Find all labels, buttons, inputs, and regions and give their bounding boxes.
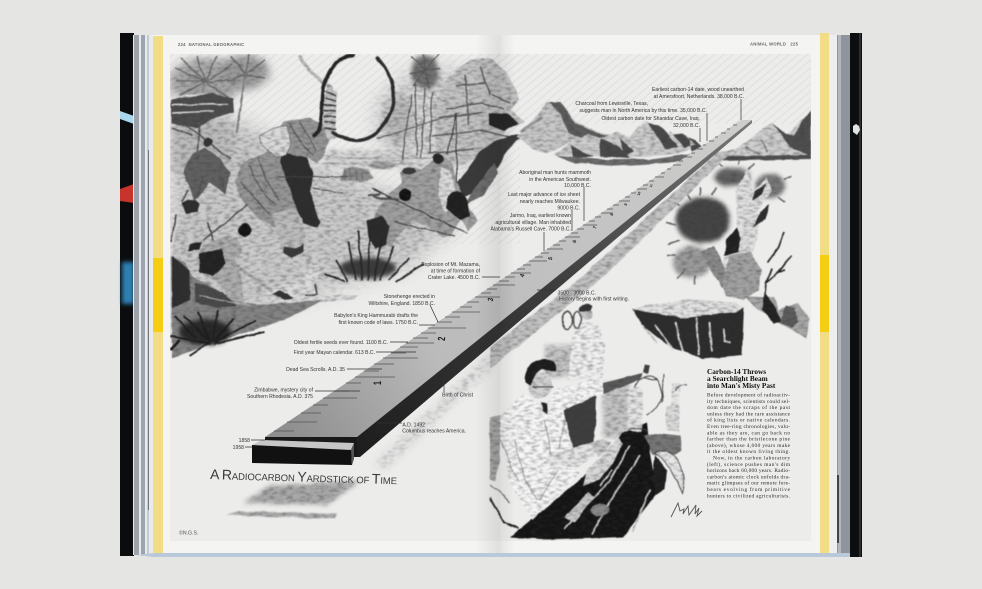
ruler side face — [357, 120, 752, 457]
label: charcoal: suggests man in North America by this time. 35,000 B.C. — [579, 108, 707, 114]
fallen hunter — [232, 263, 357, 309]
label: fertile seeds: Oldest fertile seeds ever found. 1100 B.C. — [294, 340, 388, 346]
article body: bears evolving from primitive — [707, 486, 791, 493]
ruler numerals: 5 — [548, 256, 554, 261]
label: earliest date: at Amersfoort, Netherlands. 38,000 B.C. — [654, 94, 744, 100]
right cover edge — [850, 33, 862, 557]
callout lines — [245, 99, 741, 447]
label: 1958: 1958 — [233, 445, 244, 451]
label: Mazama: Explosion of Mt. Mazama, — [421, 262, 480, 268]
label: Jarmo: Alabama's Russell Cave. 7000 B.C. — [490, 226, 571, 232]
mid-ground hunters left — [182, 138, 230, 202]
gutter shadow — [475, 35, 515, 553]
ruler shadow band — [490, 149, 735, 369]
label: Mayan calendar: First year Mayan calendar. 613 B.C. — [294, 350, 375, 356]
foreground dark ground and palms — [170, 256, 324, 358]
label: earliest date: Earliest carbon-14 date, wood unearthed — [652, 87, 744, 93]
foreground scientist — [490, 360, 643, 528]
ruler numerals: 9 — [623, 202, 629, 206]
ruler numerals: 4 — [520, 273, 527, 278]
ruler graduations — [274, 125, 737, 431]
thrown spear — [377, 113, 459, 139]
left palms and rocks — [169, 54, 269, 173]
timeline labels — [233, 87, 744, 451]
mountain chain — [553, 121, 700, 158]
page header left: 224 NATIONAL GEOGRAPHIC — [178, 42, 244, 47]
label: Mazama: at time of formation of — [431, 268, 481, 274]
ground shadow — [227, 355, 490, 519]
article body: Even tree-ring chronologies, valu- — [707, 424, 790, 430]
article body: it the oldest known living thing. — [707, 449, 790, 455]
spears in mammoth — [278, 177, 348, 193]
tree stump cross-section — [632, 299, 744, 359]
label: Hammurabi: Babylon's King Hammurabi drafts the — [334, 313, 418, 319]
label: Columbus: Columbus reaches America. — [402, 428, 466, 434]
label: mammoth: Aboriginal man hunts mammoth — [519, 170, 591, 176]
hunter group right — [366, 113, 478, 249]
label: Mazama: Crater Lake. 4500 B.C. — [428, 275, 480, 281]
label: Zimbabwe: Zimbabwe, mystery city of — [254, 388, 314, 394]
scene tonal washes — [172, 70, 505, 335]
right page edges — [829, 35, 850, 554]
article body: Now, in the carbon laboratory — [713, 456, 790, 462]
label: mammoth: in the American Southwest. — [529, 177, 591, 183]
tusks — [314, 55, 353, 136]
label: Zimbabwe: Southern Rhodesia. A.D. 375 — [247, 394, 313, 400]
article body: ity techniques, scientists could sel- — [707, 399, 790, 405]
article body: (above), whose 4,600 years make — [707, 442, 791, 449]
article body: unless they had the rare assistance — [707, 411, 791, 417]
left page edges — [133, 35, 154, 555]
left jungle scene — [169, 52, 811, 540]
article body: of king lists or native calendars. — [707, 417, 790, 424]
raised trunk — [323, 86, 337, 140]
label: ice sheet: Last major advance of ice sheet — [508, 192, 581, 198]
foreground plant centre — [325, 228, 423, 282]
crouching man — [195, 236, 245, 316]
lab bench — [510, 423, 657, 540]
hunters left foreground — [170, 200, 252, 316]
label: first writing: 3500 - 3000 B.C. — [557, 290, 596, 296]
mammoth front leg — [272, 208, 306, 257]
label: ice sheet: nearly reaches Milwaukee. — [520, 199, 580, 205]
label: Dead Sea Scrolls: Dead Sea Scrolls. A.D. 35 — [286, 367, 345, 373]
article: Carbon-14 — [707, 367, 791, 499]
ruler numerals: 6 — [572, 239, 578, 244]
article body — [707, 392, 791, 499]
label: 1858: 1858 — [239, 438, 250, 444]
ruler numerals: 10 — [637, 191, 642, 196]
ruler top face — [265, 120, 752, 437]
laboratory scene — [490, 304, 687, 540]
article body: farther than the bristlecone pine — [707, 436, 791, 443]
label: Jarmo: Jarmo, Iraq, earliest known — [510, 213, 571, 219]
label: ice sheet: 9000 B.C. — [557, 206, 580, 212]
lake and reeds — [322, 150, 440, 182]
ruler numerals: 8 — [609, 212, 615, 216]
label: Columbus: A.D. 1492 — [402, 422, 425, 428]
copyright: ©N.G.S. — [179, 530, 198, 536]
article body: matic glimpses of our remote fore- — [707, 480, 790, 487]
volcano — [517, 102, 612, 154]
label: Shanidar: 32,000 B.C. — [673, 123, 700, 129]
ruler numerals: 3 — [487, 297, 496, 302]
ruler numerals: 11 — [649, 183, 654, 188]
illustration panel — [169, 35, 811, 553]
mountains — [517, 102, 811, 166]
left yellow edge band — [153, 36, 163, 553]
article heading: into Man's Misty Past — [707, 381, 776, 390]
open book — [120, 33, 862, 557]
pages — [153, 35, 829, 553]
ruler numerals — [371, 183, 654, 385]
article body: Before development of radioactiv- — [707, 392, 790, 398]
article heading: Carbon-14 Throws — [707, 367, 766, 376]
article body: able as they are, can go back no — [707, 430, 790, 436]
artist signature — [671, 503, 702, 517]
lab equipment — [564, 364, 687, 535]
ruler end face — [265, 437, 357, 457]
label: Birth of Christ: Birth of Christ — [442, 392, 474, 398]
article heading: a Searchlight Beam — [707, 374, 768, 383]
article body: hunters to civilized agriculturists. — [707, 493, 790, 499]
radiocarbon yardstick — [252, 120, 752, 465]
label: Jarmo: agricultural village. Man inhabited — [495, 220, 571, 226]
article body: (left), science pushes man's dim — [707, 461, 791, 468]
page header right: ANIMAL WORLD 225 — [750, 42, 799, 46]
article body: carbon's atomic clock unfolds dra- — [707, 473, 790, 480]
label: Hammurabi: first known code of laws. 1750 B.C. — [338, 320, 418, 326]
left cover edge — [120, 33, 134, 556]
cliff rocks — [428, 58, 526, 205]
ruler numerals: 2 — [435, 336, 448, 341]
label: Stonehenge: Wiltshire, England. 1850 B.C. — [368, 301, 435, 307]
bristlecone pine tree — [666, 158, 809, 338]
ruler numerals: 1 — [371, 381, 383, 385]
right yellow edge band — [820, 33, 829, 553]
main title: A RADIOCARBON YARDSTICK OF TIME — [210, 466, 397, 487]
article body: horizons back 60,000 years. Radio- — [707, 468, 790, 474]
woman hunter — [170, 212, 210, 276]
label: Stonehenge: Stonehenge erected in — [384, 294, 435, 300]
short present-day ruler piece — [252, 440, 354, 450]
mammoth ear — [260, 126, 291, 157]
label: charcoal: Charcoal from Lewisville, Texas, — [575, 101, 648, 107]
ruler numerals: 7 — [592, 225, 598, 230]
right mountains — [723, 112, 811, 157]
article body: dom date the scraps of the past — [707, 404, 790, 411]
mammoth body — [235, 118, 330, 257]
label: mammoth: 10,000 B.C. — [564, 183, 591, 189]
page bottom edge — [136, 553, 850, 557]
mammoth — [235, 55, 394, 258]
label: first writing: History begins with first writing. — [559, 296, 629, 302]
label: Shanidar: Oldest carbon date for Shanidar Cave, Iraq. — [601, 116, 700, 122]
rear scientist — [545, 304, 629, 449]
palms behind hunters — [383, 52, 441, 160]
